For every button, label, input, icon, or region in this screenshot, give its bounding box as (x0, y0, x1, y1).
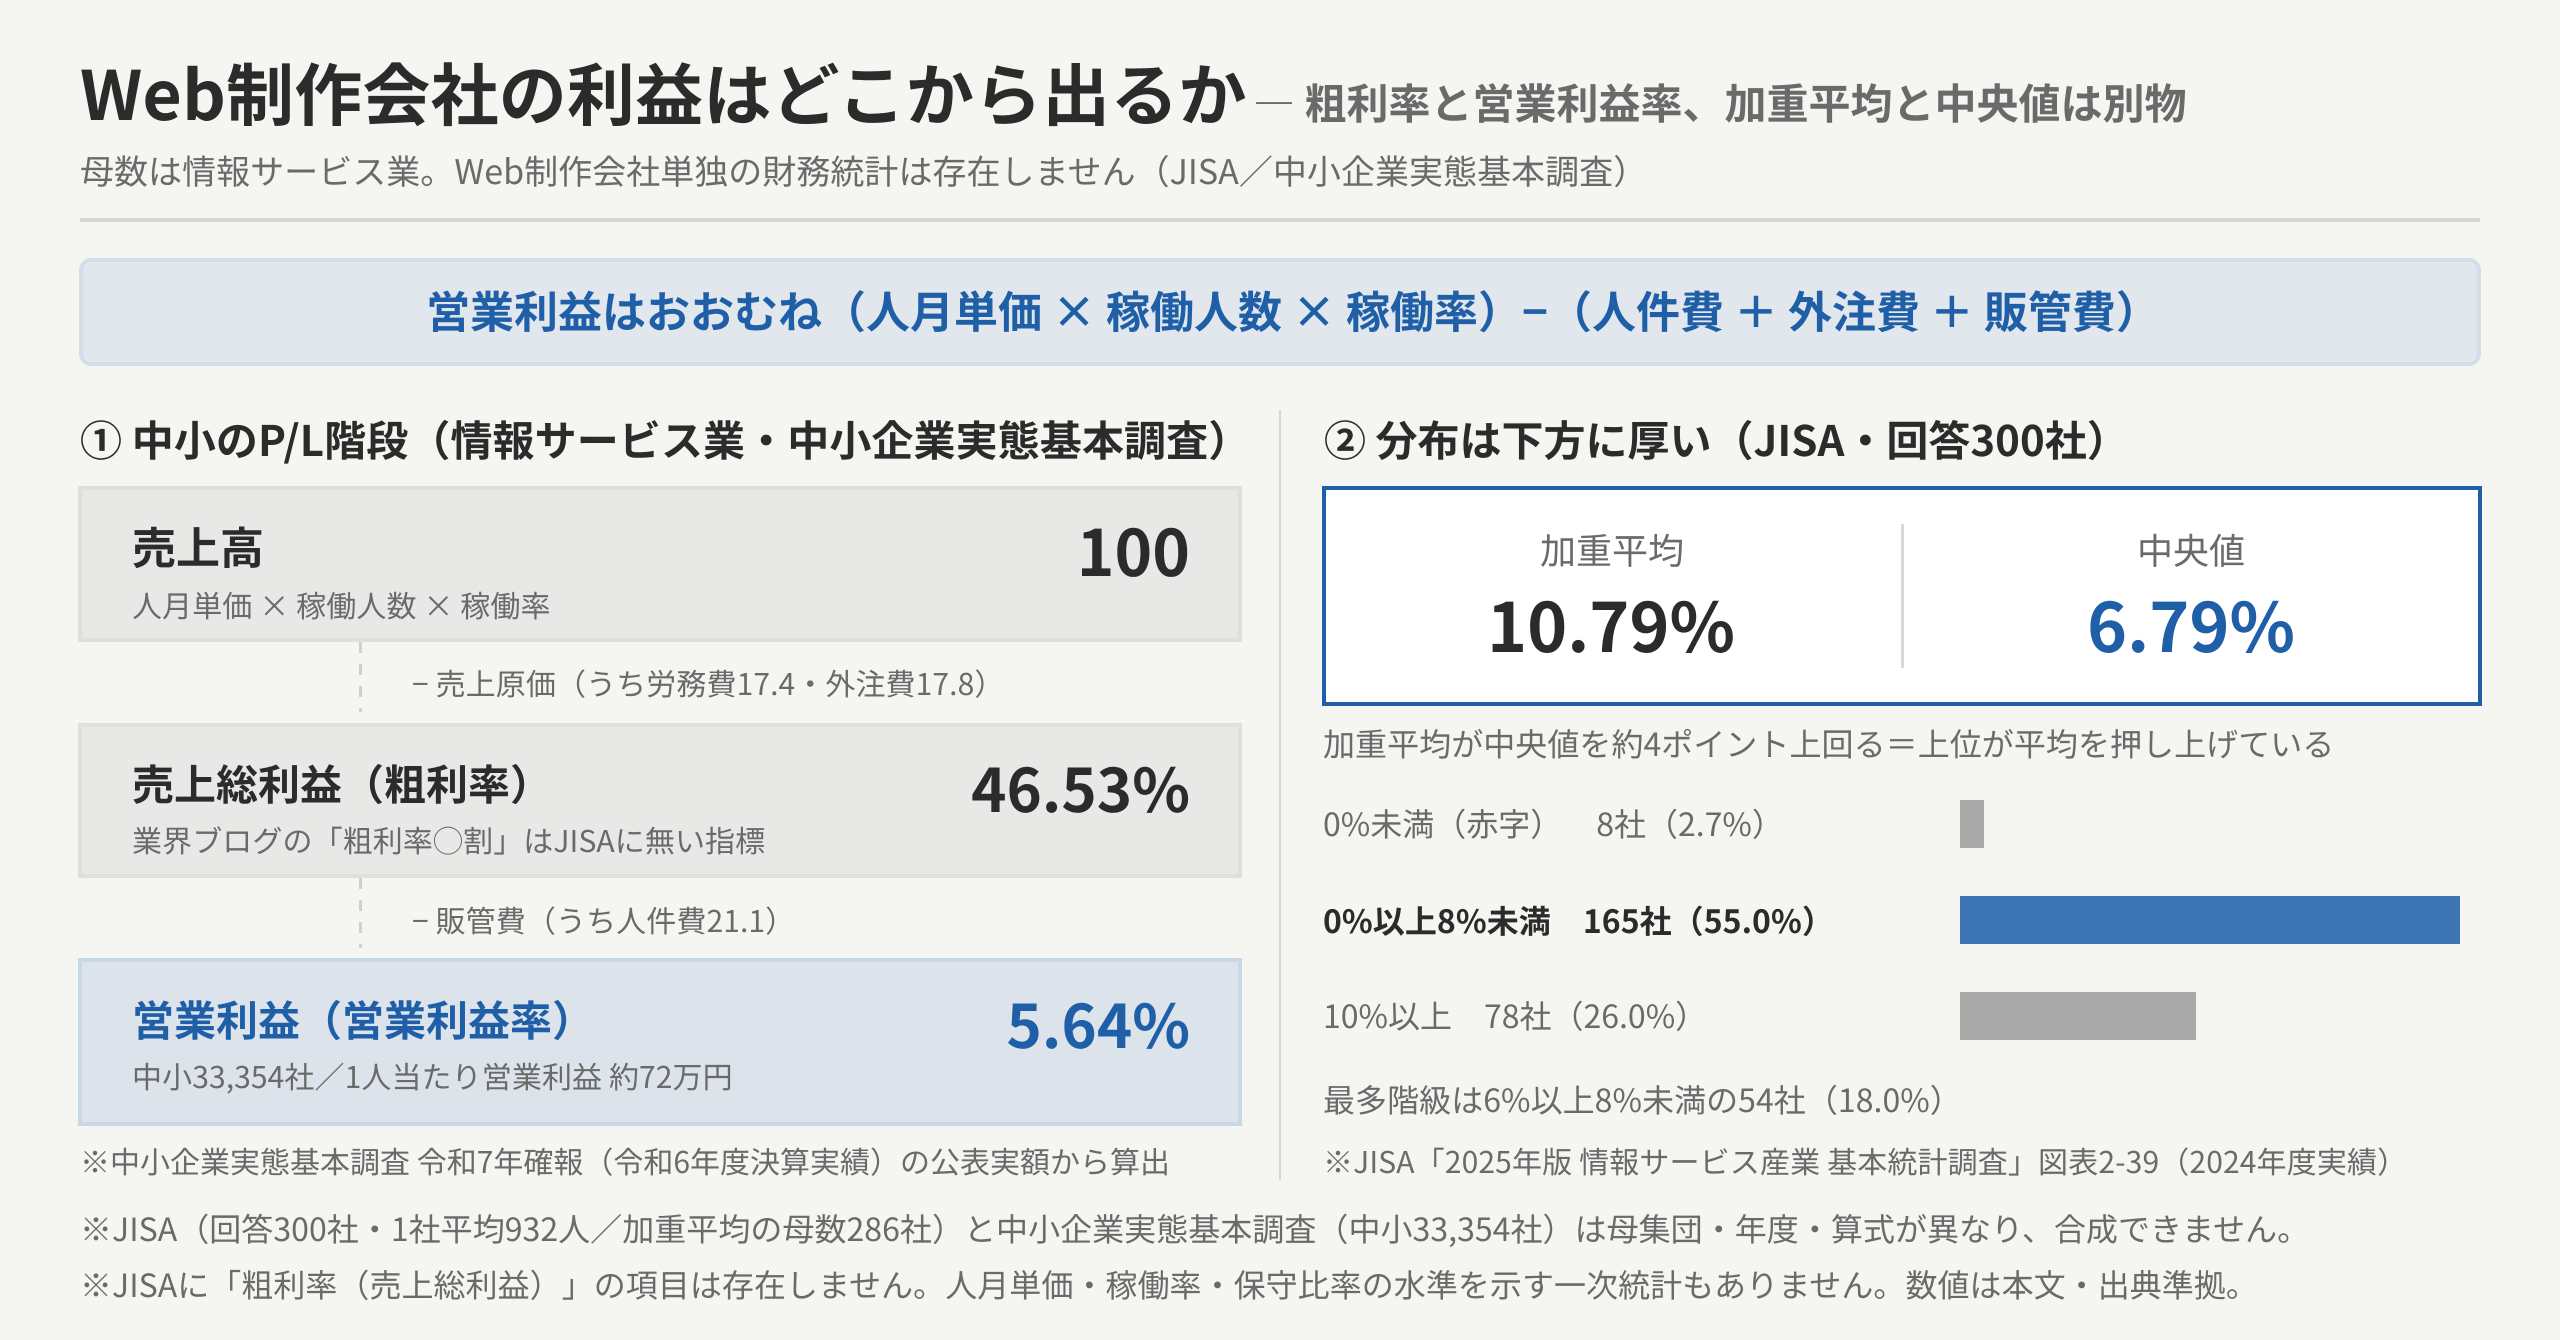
label: gross profit: 売上総利益（粗利率） (132, 752, 552, 813)
cost of sales text: − 売上原価（うち労務費17.4・外注費17.8） (412, 660, 1004, 704)
bar: under 0% (1960, 800, 1984, 848)
median value: 6.79% (2087, 573, 2295, 672)
row label: over 10%: 10%以上 78社（26.0%） (1323, 992, 1707, 1038)
bar: 0-8% (1960, 896, 2460, 944)
row label: under 0%: 0%未満（赤字） 8社（2.7%） (1323, 800, 1784, 846)
median label: 中央値 (2137, 523, 2245, 575)
value: operating margin: 5.64% (1007, 979, 1190, 1066)
panel: operating profit (78, 958, 1242, 1126)
lead text: 母数は情報サービス業。Web制作会社単独の財務統計は存在しません（JISA／中小企業実態基本調査） (80, 145, 1647, 194)
panel: mean vs median (1322, 486, 2482, 706)
weighted mean label: 加重平均 (1540, 523, 1684, 575)
panel: gross profit (78, 723, 1242, 878)
label: operating profit: 営業利益（営業利益率） (132, 988, 594, 1049)
gross profit note: 業界ブログの「粗利率◯割」はJISAに無い指標 (132, 817, 765, 861)
formula banner (79, 258, 2481, 366)
bottom note 2: ※JISAに「粗利率（売上総利益）」の項目は存在しません。人月単価・稼働率・保守比率の水準を示す一次統計もありません。数値は本文・出典準拠。 (80, 1261, 2258, 1307)
operating profit note: 中小33,354社／1人当たり営業利益 約72万円 (132, 1053, 733, 1097)
left footnote: ※中小企業実態基本調査 令和7年確報（令和6年度決算実績）の公表実額から算出 (80, 1138, 1170, 1182)
interpretation text: 加重平均が中央値を約4ポイント上回る＝上位が平均を押し上げている (1323, 720, 2334, 766)
bottom note 1: ※JISA（回答300社・1社平均932人／加重平均の母数286社）と中小企業実態基本調査（中小33,354社）は母集団・年度・算式が異なり、合成できません。 (80, 1205, 2309, 1251)
heading: P/L ladder: ① 中小のP/L階段（情報サービス業・中小企業実態基本調査） (80, 408, 1250, 469)
value: 100: 100 (1077, 503, 1190, 595)
sales formula: 人月単価 × 稼働人数 × 稼働率 (132, 582, 551, 626)
SG&A text: − 販管費（うち人件費21.1） (412, 897, 795, 941)
row label: 0-8%: 0%以上8%未満 165社（55.0%） (1323, 897, 1834, 943)
value: gross margin: 46.53% (971, 743, 1190, 830)
panel: sales (78, 486, 1242, 642)
subtitle heading: — 粗利率と営業利益率、加重平均と中央値は別物 (1253, 71, 2187, 132)
title: Web制作会社の利益はどこから出るか (80, 41, 1247, 140)
connector: cost of sales (359, 642, 1004, 712)
heading: distribution: ② 分布は下方に厚い（JISA・回答300社） (1324, 408, 2129, 469)
weighted mean value: 10.79% (1487, 573, 1735, 672)
formula banner: 営業利益はおおむね（人月単価 × 稼働人数 × 稼働率）−（人件費 ＋ 外注費 ＋ 販管費） (426, 277, 2160, 341)
connector: SG&A (359, 878, 795, 948)
label: sales: 売上高 (132, 513, 264, 577)
modal class note: 最多階級は6%以上8%未満の54社（18.0%） (1323, 1076, 1962, 1122)
right footnote: ※JISA「2025年版 情報サービス産業 基本統計調査」図表2-39（2024年度実績） (1323, 1138, 2407, 1182)
bar chart: distribution (1323, 800, 2460, 1040)
bar: over 10% (1960, 992, 2196, 1040)
